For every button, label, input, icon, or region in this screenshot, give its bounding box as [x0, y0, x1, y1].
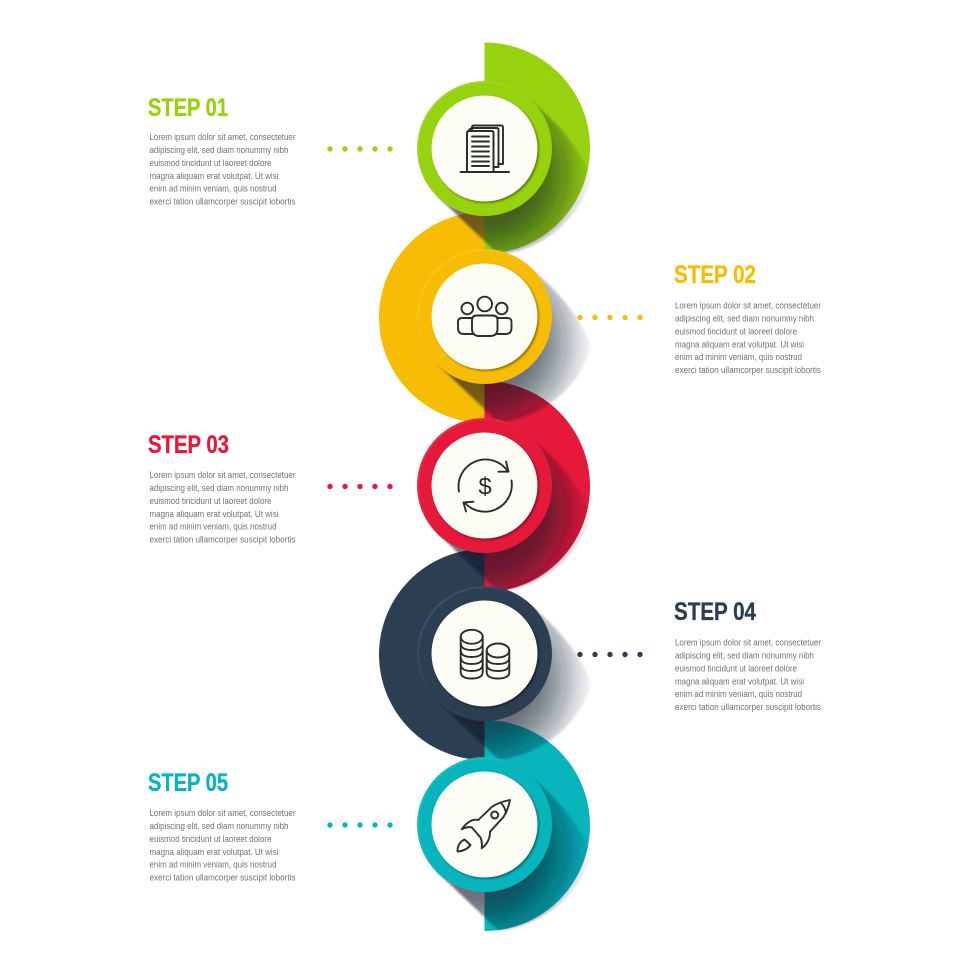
body text: step 5: euismod tincidunt ut laoreet dolore	[150, 834, 272, 844]
body text: step 2	[675, 300, 821, 375]
body text: step 1: exerci tation ullamcorper suscipit lobortis	[150, 196, 296, 206]
body text: step 3: magna aliquam erat volutpat. Ut wisi	[150, 509, 278, 519]
semicircle bands	[379, 42, 590, 931]
body text: step 1: magna aliquam erat volutpat. Ut wisi	[150, 171, 278, 181]
dotted connector: step 1	[327, 146, 393, 152]
band: step 3 red right half	[484, 381, 590, 592]
band: step 2 yellow left half	[379, 212, 484, 423]
body text: step 2: euismod tincidunt ut laoreet dolore	[675, 326, 797, 336]
heading: step 01: STEP 01	[148, 94, 228, 122]
body text: step 2: Lorem ipsum dolor sit amet, consectetuer	[675, 300, 821, 310]
body text: step 4	[675, 638, 821, 712]
dotted connector: step 4	[577, 652, 643, 657]
icon: people	[458, 297, 512, 336]
icon: coins	[461, 630, 509, 678]
body text: step 1: euismod tincidunt ut laoreet dolore	[150, 158, 272, 168]
body text: step 5	[150, 808, 296, 882]
body text: step 5: enim ad minim veniam, quis nostrud	[150, 860, 276, 870]
body text: step 3	[150, 470, 296, 544]
band: step 4 navy left half	[379, 549, 484, 760]
dotted connector: step 2	[577, 315, 643, 320]
panel: step 3 text	[148, 431, 296, 544]
body text: step 3: adipiscing elit, sed diam nonummy nibh	[150, 483, 288, 493]
panel: step 1 text	[148, 94, 296, 206]
long shadows	[437, 101, 592, 931]
icon: dollar cycle: $	[478, 474, 492, 500]
body text: step 2: adipiscing elit, sed diam nonummy nibh	[675, 314, 814, 324]
band: step 1 green right half	[484, 42, 590, 254]
body text: step 5: Lorem ipsum dolor sit amet, consectetuer	[150, 808, 296, 818]
body text: step 3: euismod tincidunt ut laoreet dolore	[150, 496, 272, 506]
body text: step 1: adipiscing elit, sed diam nonummy nibh	[150, 145, 288, 155]
body text: step 4: exerci tation ullamcorper suscipit lobortis	[675, 702, 821, 712]
body text: step 2: enim ad minim veniam, quis nostrud	[675, 352, 802, 362]
body text: step 3: enim ad minim veniam, quis nostrud	[150, 522, 276, 532]
medallion: step 1	[417, 81, 552, 216]
body text: step 3: Lorem ipsum dolor sit amet, consectetuer	[150, 470, 296, 480]
medallion: step 4	[417, 586, 552, 721]
medallion: step 2	[417, 249, 552, 384]
band: step 5 teal right half	[484, 720, 590, 931]
body text: step 2: magna aliquam erat volutpat. Ut wisi	[675, 340, 804, 350]
body text: step 2: exerci tation ullamcorper suscipit lobortis	[675, 365, 821, 375]
panel: step 4 text	[674, 598, 821, 712]
medallion: step 3	[417, 418, 552, 553]
body text: step 4: Lorem ipsum dolor sit amet, consectetuer	[675, 638, 821, 648]
heading: step 02: STEP 02	[674, 261, 756, 289]
heading: step 04: STEP 04	[674, 598, 756, 626]
body text: step 1: Lorem ipsum dolor sit amet, consectetuer	[150, 132, 296, 142]
icon: rocket	[458, 800, 510, 852]
dotted connector: step 3	[327, 484, 393, 489]
medallion: step 5	[417, 757, 552, 892]
heading: step 03: STEP 03	[148, 431, 229, 459]
body text: step 1	[150, 132, 296, 206]
icon: documents	[460, 126, 509, 172]
body text: step 3: exerci tation ullamcorper suscipit lobortis	[150, 534, 296, 544]
panel: step 5 text	[148, 769, 296, 882]
body text: step 4: euismod tincidunt ut laoreet dolore	[675, 664, 797, 674]
body text: step 1: enim ad minim veniam, quis nostrud	[150, 184, 276, 194]
panel: step 2 text	[674, 261, 821, 375]
body text: step 4: enim ad minim veniam, quis nostrud	[675, 689, 802, 699]
body text: step 4: adipiscing elit, sed diam nonummy nibh	[675, 650, 814, 660]
heading: step 05: STEP 05	[148, 769, 228, 797]
body text: step 4: magna aliquam erat volutpat. Ut wisi	[675, 676, 804, 686]
body text: step 5: adipiscing elit, sed diam nonummy nibh	[150, 821, 288, 831]
dotted connector: step 5	[327, 822, 393, 828]
body text: step 5: magna aliquam erat volutpat. Ut wisi	[150, 847, 278, 857]
body text: step 5: exerci tation ullamcorper suscipit lobortis	[150, 872, 296, 882]
